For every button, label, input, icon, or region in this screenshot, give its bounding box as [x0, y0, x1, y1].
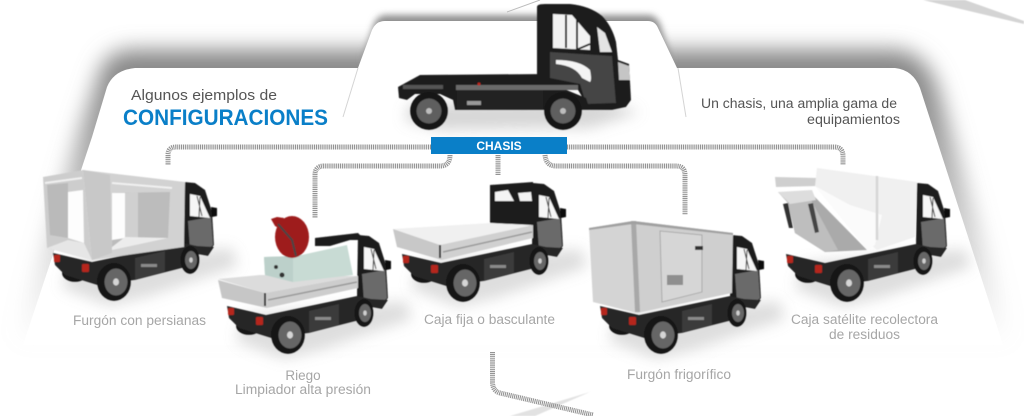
label: riego limpiador — [235, 368, 371, 397]
heading: Algunos ejemplos de — [131, 87, 277, 104]
main chassis truck — [398, 4, 640, 130]
label: riego limpiador: Riego — [285, 368, 321, 383]
heading — [123, 87, 328, 130]
truck: riego — [218, 216, 412, 359]
chassis label: CHASIS — [476, 139, 522, 153]
tagline — [701, 96, 900, 127]
truck: caja satélite recolectora — [775, 168, 971, 307]
label: caja satélite recolectora: de residuos — [829, 327, 900, 342]
heading: CONFIGURACIONES — [123, 105, 328, 130]
chassis label — [431, 137, 567, 154]
truck: caja fija o basculante — [393, 182, 587, 307]
label: furgón frigorífico: Furgón frigorífico — [627, 367, 731, 382]
truck: furgón con persianas — [43, 170, 238, 306]
tagline: equipamientos — [807, 112, 900, 127]
label: furgón con persianas: Furgón con persianas — [73, 313, 206, 328]
label: caja satélite recolectora — [791, 312, 938, 342]
label: riego limpiador: Limpiador alta presión — [235, 382, 371, 397]
truck: furgón frigorífico — [589, 221, 785, 359]
label: caja satélite recolectora: Caja satélite recolectora — [791, 312, 938, 327]
label: caja fija o basculante: Caja fija o basculante — [424, 312, 555, 327]
tagline: Un chasis, una amplia gama de — [701, 96, 897, 111]
connectors — [168, 147, 843, 415]
